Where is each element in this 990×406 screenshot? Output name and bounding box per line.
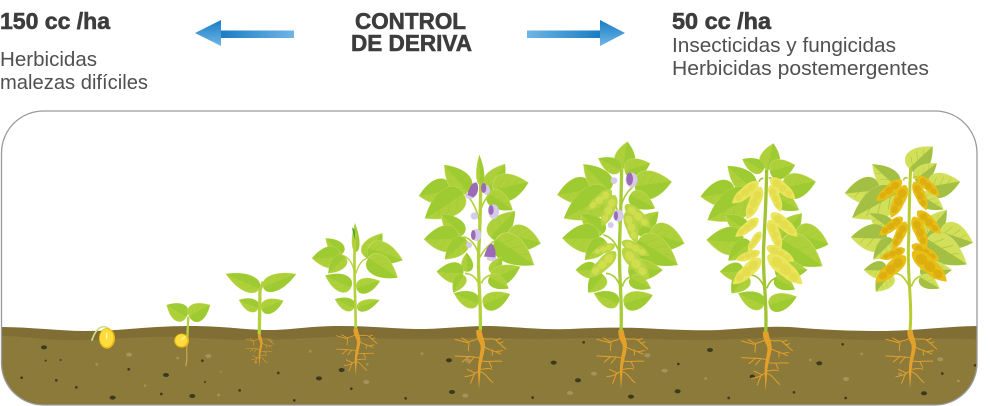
plant stage 7: yellowing pods (699, 141, 833, 391)
title: control de deriva (351, 8, 472, 56)
title: control de deriva: DE DERIVA (351, 30, 472, 56)
right text: insecticidas, fungicidas, herbicidas postemergentes: Herbicidas postemergentes (672, 58, 929, 80)
left text: herbicidas malezas difíciles: malezas difíciles (0, 72, 148, 94)
plant stage 3: young plant (223, 266, 299, 367)
right text: insecticidas, fungicidas, herbicidas postemergentes: Insecticidas y fungicidas (672, 35, 896, 57)
right text: insecticidas, fungicidas, herbicidas postemergentes (672, 35, 929, 80)
right arrow (527, 20, 625, 46)
left text: herbicidas malezas difíciles: Herbicidas (0, 49, 97, 71)
plant stage 5: flowering plant (416, 155, 544, 389)
right heading: 50 cc/ha: 50 cc /ha (672, 8, 771, 34)
plant stage 4: growing plant (311, 223, 406, 376)
left text: herbicidas malezas difíciles (0, 49, 148, 94)
plant stage 2: seedling (162, 297, 215, 366)
title: control de deriva: CONTROL (355, 8, 466, 34)
plant stage 8: mature golden pods (843, 138, 977, 389)
soil ground (0, 326, 980, 406)
plant stage 6: green pods (555, 140, 688, 389)
panel frame (2, 111, 977, 405)
left heading: 150 cc/ha: 150 cc /ha (0, 8, 110, 34)
left arrow (195, 20, 294, 46)
plant stage 1: germinating seed (92, 327, 115, 349)
